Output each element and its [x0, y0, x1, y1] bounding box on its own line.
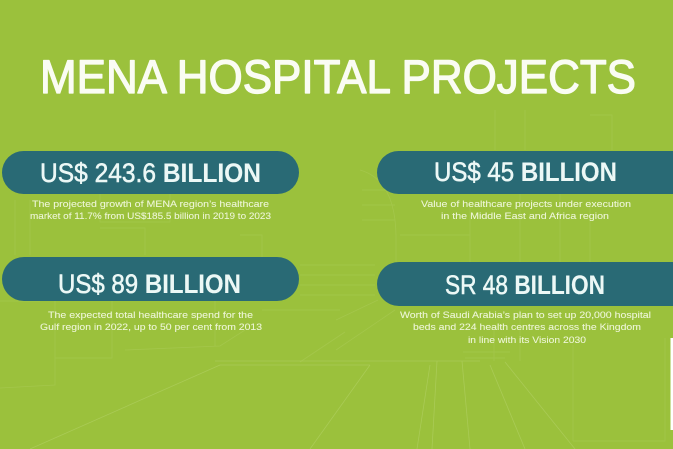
pill: SR 48 billion: SR 48 BILLION: [445, 270, 605, 300]
panel: US$ 243.6 billion: [2, 151, 299, 222]
description: total healthcare spend: The expected total healthcare spend for the: [48, 310, 253, 321]
pill: US$ 89 billion: US$ 89 BILLION: [58, 269, 241, 299]
description: projects under execution: [421, 199, 631, 222]
pill: US$ 45 billion: US$ 45 BILLION: [434, 157, 617, 187]
description: total healthcare spend: [40, 310, 262, 333]
description: Saudi Arabia's plan: beds and 224 health centres across the Kingdom: [413, 322, 641, 333]
description: projected growth: [30, 199, 271, 222]
pill: SR 48 billion: [377, 262, 673, 306]
description: projected growth: market of 11.7% from US$185.5 billion in 2019 to 2023: [30, 211, 271, 222]
description: projected growth: The projected growth of MENA region’s healthcare: [32, 199, 269, 210]
background: faint city line drawing: [0, 110, 665, 449]
panel: US$ 45 billion: [377, 151, 673, 222]
panel: SR 48 billion: [377, 262, 673, 346]
pill: US$ 243.6 billion: US$ 243.6 BILLION: [40, 158, 261, 188]
description: Saudi Arabia's plan: Worth of Saudi Arabia’s plan to set up 20,000 hospital: [400, 310, 651, 321]
description: projects under execution: in the Middle East and Africa region: [441, 211, 609, 222]
pill: US$ 243.6 billion: [2, 151, 299, 194]
description: Saudi Arabia's plan: in line with its Vision 2030: [468, 335, 586, 346]
panel: US$ 89 billion: [2, 257, 299, 333]
description: Saudi Arabia's plan: [400, 310, 651, 346]
pill: US$ 89 billion: [2, 257, 299, 301]
white edge bar: [670, 338, 673, 430]
description: projects under execution: Value of healthcare projects under execution: [421, 199, 631, 210]
title: MENA HOSPITAL PROJECTS: [40, 50, 636, 103]
description: total healthcare spend: Gulf region in 2022, up to 50 per cent from 2013: [40, 322, 262, 333]
pill: US$ 45 billion: [377, 151, 673, 194]
